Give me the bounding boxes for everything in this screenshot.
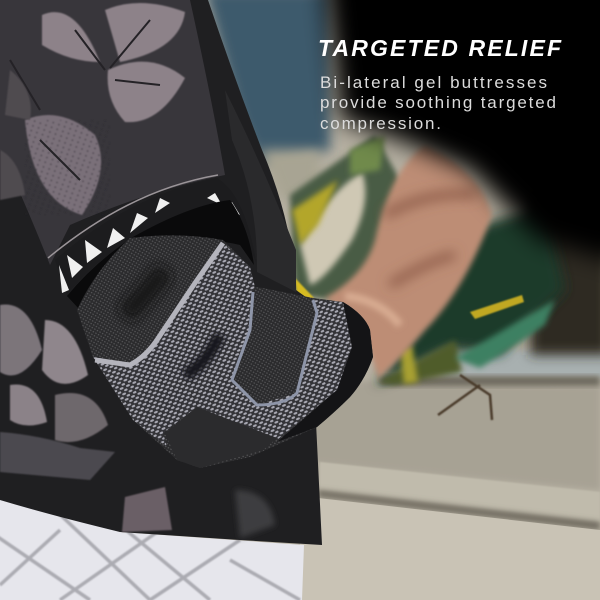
shoelace <box>438 375 492 420</box>
dark top right gradient <box>318 0 600 280</box>
dark shadow patches <box>125 270 165 315</box>
panel: floral shirt <box>0 0 322 545</box>
sleeve body <box>77 235 373 468</box>
icon: hand <box>325 145 492 378</box>
black sleeve hem <box>277 302 373 442</box>
body text: compression. <box>320 114 441 133</box>
body text <box>320 73 556 133</box>
white trousers below shirt <box>0 495 304 600</box>
icon: lower hibiscus flower <box>0 305 115 480</box>
icon: white triangle trim <box>59 193 240 293</box>
panel: shirt sleeve cuff with triangles <box>48 175 256 295</box>
title: TARGETED RELIEF <box>318 35 562 61</box>
pale gel border line <box>95 243 223 365</box>
body text: provide soothing targeted <box>320 93 556 112</box>
icon: upper hibiscus flower <box>25 3 185 215</box>
held shoes and hand <box>290 135 565 420</box>
body text: Bi-lateral gel buttresses <box>320 73 547 92</box>
lighter patterned area <box>93 243 352 447</box>
sleeve dark interior <box>67 200 254 310</box>
panel: elbow sleeve <box>67 200 373 468</box>
